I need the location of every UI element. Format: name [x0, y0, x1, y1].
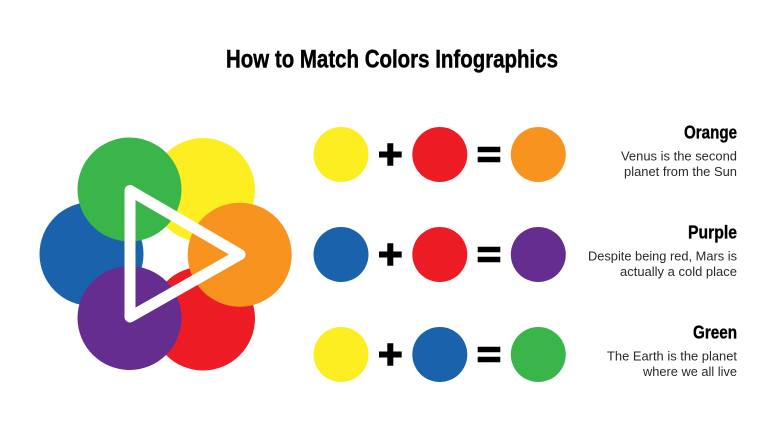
icon: red petal: [151, 266, 255, 370]
color wheel with play icon: [40, 138, 292, 370]
icon: orange petal: [188, 203, 292, 307]
equals sign: [478, 247, 500, 262]
icon: yellow petal: [151, 138, 255, 242]
plus sign: [379, 243, 402, 266]
text block: green: [607, 322, 738, 379]
description: Venus is the second: [621, 150, 737, 164]
description: The Earth is the planet: [607, 350, 738, 364]
text block: orange: planet from the Sun: [624, 165, 737, 179]
blue circle: [314, 227, 368, 282]
icon: blue petal: [40, 202, 144, 306]
heading: Green: [693, 322, 737, 342]
icon: play triangle: [130, 190, 240, 317]
heading: Orange: [684, 122, 737, 142]
equals sign: [478, 147, 500, 162]
heading: Purple: [688, 222, 737, 242]
title: How to Match Colors Infographics: [226, 46, 558, 74]
blue circle: [412, 327, 467, 382]
text block: purple: actually a cold place: [620, 265, 737, 279]
icon: purple petal: [78, 266, 182, 370]
text block: green: where we all live: [642, 365, 737, 379]
text block: purple: [588, 222, 737, 279]
orange circle: [511, 127, 566, 182]
icon: green petal: [78, 138, 182, 242]
description: Despite being red, Mars is: [588, 250, 737, 264]
plus sign: [379, 343, 402, 366]
yellow circle: [314, 127, 368, 182]
equation row: purple: [314, 227, 566, 282]
red circle: [412, 227, 467, 282]
yellow circle: [314, 327, 368, 382]
equation row: green: [314, 327, 566, 382]
red circle: [412, 127, 467, 182]
equation row: orange: [314, 127, 566, 182]
equals sign: [478, 347, 500, 362]
text block: orange: [621, 122, 737, 179]
purple circle: [511, 227, 566, 282]
plus sign: [379, 143, 402, 166]
green circle: [511, 327, 566, 382]
